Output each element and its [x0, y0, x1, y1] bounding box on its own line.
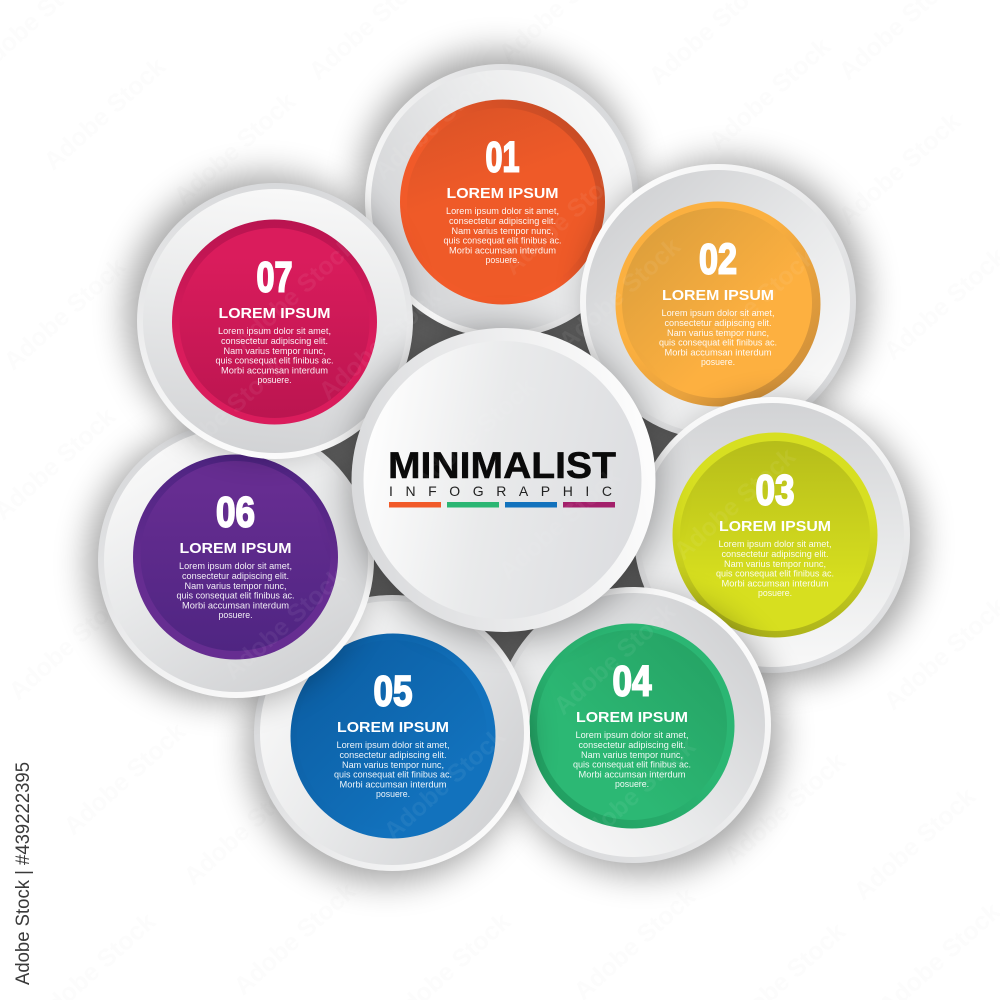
watermark: background: Adobe Stock	[169, 87, 301, 211]
text: step 05: posuere.	[376, 789, 410, 799]
watermark: background: Adobe Stock	[4, 582, 136, 706]
watermark: over the circles: Adobe Stock	[669, 442, 801, 566]
text: step 02: posuere.	[701, 357, 735, 367]
text: step 03: posuere.	[758, 588, 792, 598]
panel: step 01	[360, 52, 639, 338]
watermark: over the circles: Adobe Stock	[549, 597, 681, 721]
watermark: over the circles: Adobe Stock	[554, 232, 686, 356]
panel: step 03	[634, 397, 920, 680]
text: step 01: LOREM IPSUM	[447, 185, 558, 202]
text: step 06: LOREM IPSUM	[180, 540, 291, 557]
stock number label: Adobe Stock | #439222395	[13, 762, 34, 985]
text: step 03	[716, 466, 834, 598]
panel: step 06	[88, 422, 374, 702]
watermark: background: Adobe Stock	[834, 107, 966, 231]
watermark: background: Adobe Stock	[39, 52, 171, 176]
text: step 07	[216, 254, 334, 385]
colour bars	[389, 502, 615, 508]
text: step 03: Nam varius tempor nunc,	[724, 559, 826, 569]
text: step 07: quis consequat elit finibus ac.	[216, 356, 334, 366]
text: step 07: LOREM IPSUM	[219, 305, 330, 322]
text: step 01	[444, 134, 562, 265]
watermark: background: Adobe Stock	[229, 877, 361, 1000]
text: step 04: Nam varius tempor nunc,	[581, 750, 683, 760]
text: step 06: quis consequat elit finibus ac.	[176, 591, 294, 601]
text: step 04	[573, 658, 691, 789]
text: step 03: quis consequat elit finibus ac.	[716, 569, 834, 579]
text: step 04: quis consequat elit finibus ac.	[573, 760, 691, 770]
text: step 07: 07	[256, 254, 292, 302]
text: step 06: 06	[216, 488, 255, 536]
text: step 04: LOREM IPSUM	[576, 709, 688, 726]
text: step 06: Morbi accumsan interdum	[182, 600, 289, 610]
text: step 03: consectetur adipiscing elit.	[722, 549, 828, 559]
watermark: over the circles: Adobe Stock	[379, 722, 511, 846]
text: step 06: posuere.	[218, 610, 252, 620]
text: step 02: quis consequat elit finibus ac.	[659, 338, 777, 348]
panel: centre title disc	[350, 328, 658, 638]
text: step 04: Morbi accumsan interdum	[578, 770, 686, 780]
panel: step 05	[248, 595, 530, 882]
watermark: over the circles: Adobe Stock	[219, 562, 351, 686]
watermark: over the circles: Adobe Stock	[569, 732, 701, 856]
text: step 02: LOREM IPSUM	[662, 287, 774, 304]
text: step 05: consectetur adipiscing elit.	[340, 750, 446, 760]
text: step 04: 04	[612, 658, 652, 706]
text: step 05: Nam varius tempor nunc,	[342, 760, 444, 770]
text: step 04: consectetur adipiscing elit.	[578, 740, 686, 750]
watermark: over the circles: Adobe Stock	[314, 282, 446, 406]
text: step 06	[176, 488, 294, 620]
text: step 02	[659, 236, 777, 367]
text: step 06: Nam varius tempor nunc,	[184, 581, 286, 591]
watermark: background: Adobe Stock	[59, 717, 191, 841]
text: step 05: Morbi accumsan interdum	[339, 780, 447, 790]
text: step 01: Nam varius tempor nunc,	[452, 226, 554, 236]
watermark: background: Adobe Stock	[849, 782, 981, 906]
watermark: background: Adobe Stock	[719, 747, 851, 871]
text: step 04: Lorem ipsum dolor sit amet,	[576, 730, 688, 740]
text: step 07: Morbi accumsan interdum	[221, 366, 328, 376]
watermark: over the circles: Adobe Stock	[369, 62, 501, 186]
text: step 06: Lorem ipsum dolor sit amet,	[179, 561, 292, 571]
text: step 01: posuere.	[486, 255, 520, 265]
subtitle: INFOGRAPHIC	[389, 483, 612, 499]
text: step 01: Morbi accumsan interdum	[449, 246, 556, 256]
text: step 05: 05	[374, 668, 412, 716]
watermark: over the circles: Adobe Stock	[499, 157, 631, 281]
text: step 06: consectetur adipiscing elit.	[182, 571, 289, 581]
text: step 02: Morbi accumsan interdum	[664, 348, 772, 358]
text: step 02: Nam varius tempor nunc,	[667, 328, 769, 338]
watermark: background: Adobe Stock	[0, 252, 131, 376]
panel: step 04	[495, 587, 780, 874]
text: step 03: 03	[756, 466, 794, 514]
watermark: over the circles	[159, 62, 821, 856]
text: step 05: LOREM IPSUM	[337, 719, 449, 736]
panel: step 02	[580, 160, 866, 440]
text: step 02: Lorem ipsum dolor sit amet,	[662, 308, 774, 318]
watermark: over the circles: Adobe Stock	[229, 232, 361, 356]
text: step 03: LOREM IPSUM	[719, 518, 831, 535]
watermark: over the circles: Adobe Stock	[689, 242, 821, 366]
watermark: background: Adobe Stock	[704, 32, 836, 156]
watermark: over the circles: Adobe Stock	[159, 352, 291, 476]
title: MINIMALIST	[388, 445, 616, 486]
text: step 02: 02	[699, 236, 737, 284]
text: step 07: Lorem ipsum dolor sit amet,	[218, 326, 331, 336]
text: step 04: posuere.	[615, 779, 649, 789]
panel: step 07	[127, 175, 413, 459]
text: step 05: quis consequat elit finibus ac.	[334, 770, 452, 780]
watermark: over the circles: Adobe Stock	[409, 372, 541, 496]
text: step 03: Lorem ipsum dolor sit amet,	[718, 539, 832, 549]
text: step 03: Morbi accumsan interdum	[721, 578, 829, 588]
text: step 05: Lorem ipsum dolor sit amet,	[336, 740, 450, 750]
text: step 01: quis consequat elit finibus ac.	[444, 236, 562, 246]
text: step 07: Nam varius tempor nunc,	[224, 346, 326, 356]
text: step 01: Lorem ipsum dolor sit amet,	[446, 206, 559, 216]
text: step 01: consectetur adipiscing elit.	[449, 216, 556, 226]
watermark: over the circles: Adobe Stock	[494, 462, 626, 586]
text: step 02: consectetur adipiscing elit.	[664, 318, 772, 328]
text: step 05	[334, 668, 452, 799]
text: step 07: consectetur adipiscing elit.	[221, 336, 328, 346]
dark gap behind the centre	[298, 275, 708, 685]
text: step 07: posuere.	[258, 375, 292, 385]
text: step 01: 01	[486, 134, 520, 182]
watermark: background: Adobe Stock	[179, 767, 311, 891]
